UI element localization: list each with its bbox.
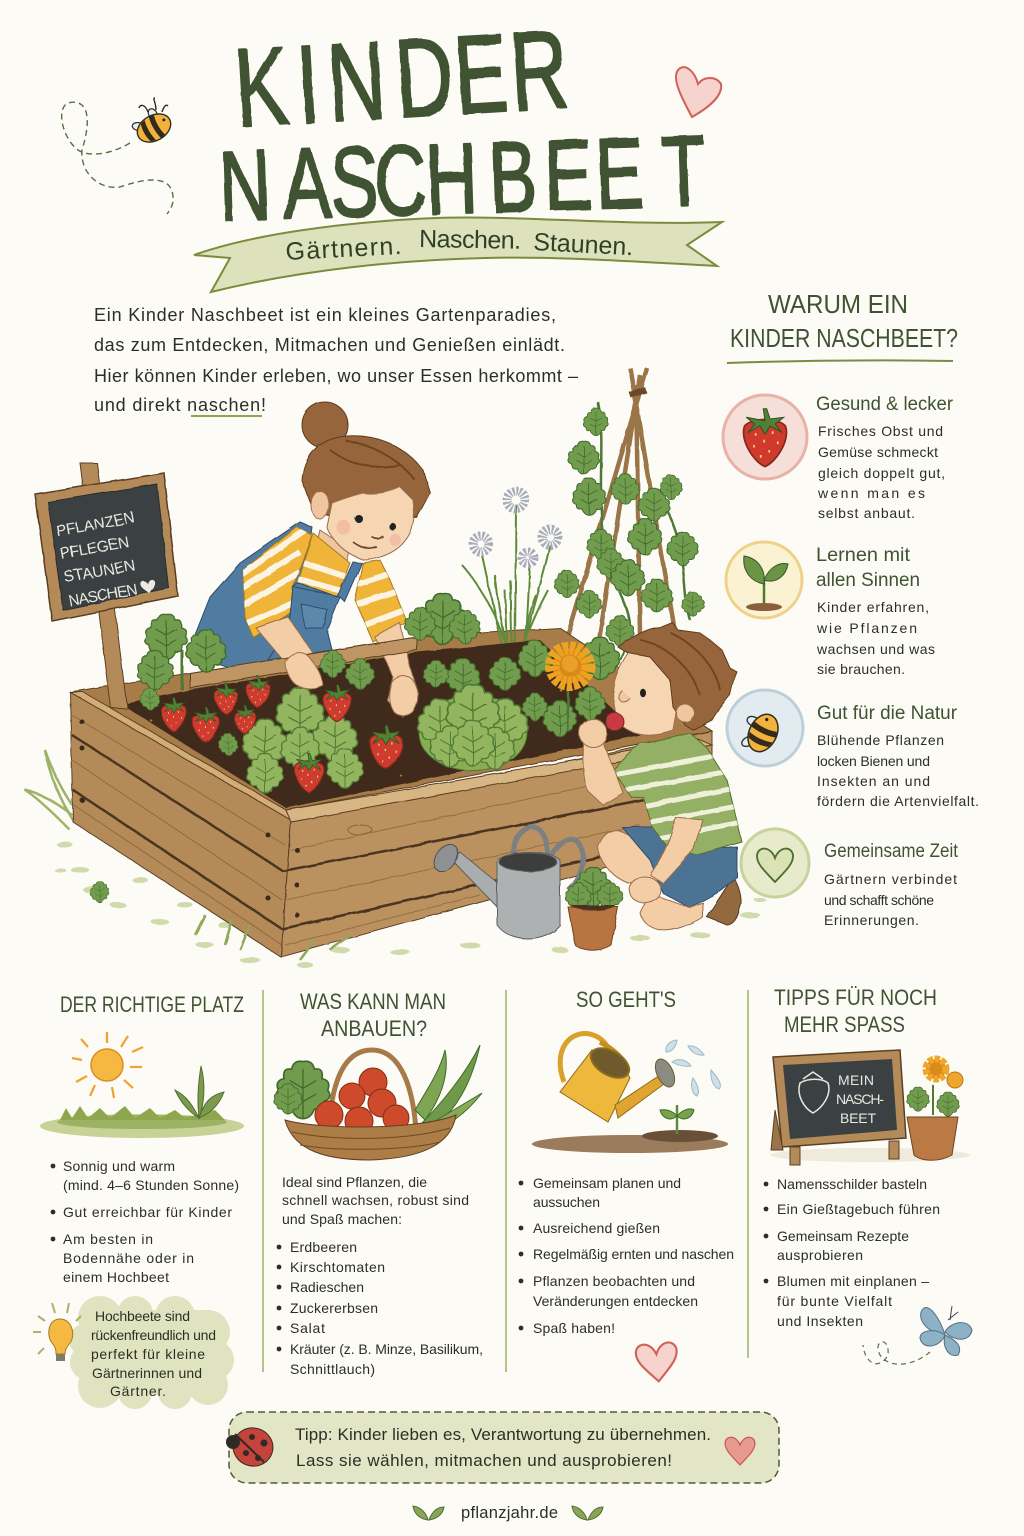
column heading [774, 985, 937, 1037]
column heading: SO GEHT'S [576, 987, 676, 1012]
bullet list: ausprobieren [777, 1247, 863, 1263]
intro paragraph: und Spaß machen: [282, 1211, 402, 1227]
bullet list: Namensschilder basteln [777, 1176, 927, 1192]
grass at bed base [195, 915, 350, 960]
benefit: gesund: Frisches Obst und [818, 423, 943, 439]
bed rim in front of girl [190, 637, 417, 688]
banner subtitle: Staunen. [533, 228, 634, 261]
boy [579, 622, 742, 930]
column 2: was kann man anbauen [274, 989, 483, 1377]
footer [413, 1504, 603, 1522]
benefit: zeit: Gemeinsame Zeit [824, 841, 959, 862]
bullet list: Bodennähe oder in [63, 1250, 194, 1266]
bullet list [51, 1158, 239, 1285]
bullet list: (mind. 4–6 Stunden Sonne) [63, 1177, 239, 1193]
soil [121, 640, 640, 808]
benefit: gesund: selbst anbaut. [818, 505, 915, 521]
bullet list: Blumen mit einplanen – [777, 1273, 929, 1289]
tepee poles [565, 368, 676, 660]
arm to knee [650, 817, 703, 883]
bullet list: Pflanzen beobachten und [533, 1273, 695, 1289]
benefit: gesund: Gemüse schmeckt [818, 444, 938, 460]
intro paragraph [282, 1174, 469, 1227]
column heading: TIPPS FÜR NOCH [774, 985, 937, 1010]
banner [194, 217, 722, 292]
bed left face [70, 692, 291, 957]
icon: soil and sprout [532, 1105, 728, 1153]
icon: ladybug [226, 1423, 277, 1471]
icon: chalkboard with pot: MEIN [838, 1072, 874, 1088]
lettuce [417, 684, 528, 771]
callout: hochbeete [69, 1296, 234, 1409]
bib and straps [268, 562, 362, 660]
benefit: zeit [741, 829, 959, 928]
leg upper [598, 830, 665, 883]
climbing plant [554, 402, 704, 660]
benefit: lernen: wie Pflanzen [816, 620, 917, 636]
bullet list: Spaß haben! [533, 1320, 615, 1336]
benefit: lernen: wachsen und was [816, 641, 935, 657]
intro text: das zum Entdecken, Mitmachen und Genießen einlädt. [94, 335, 565, 355]
sign text: NASCHEN [67, 581, 139, 610]
bullet list: Ausreichend gießen [533, 1220, 660, 1236]
bed back rim [70, 628, 712, 810]
shirt with stripes [236, 527, 410, 642]
icon: chalkboard with pot: NASCH- [836, 1091, 884, 1107]
benefit: natur: Insekten an und [817, 773, 930, 789]
benefit: zeit: Gärtnern verbindet [824, 871, 957, 887]
benefit: natur: Gut für die Natur [817, 703, 958, 724]
title: KINDER [231, 7, 572, 151]
intro text: Hier können Kinder erleben, wo unser Essen herkommt – [94, 366, 578, 386]
column heading: DER RICHTIGE PLATZ [60, 992, 244, 1017]
garden plants [137, 594, 620, 793]
benefit: natur [727, 690, 979, 809]
bullet list: Gemeinsam planen und [533, 1175, 681, 1191]
shirt [613, 733, 742, 855]
benefit: gesund: Gesund & lecker [816, 394, 954, 415]
bullet list [277, 1239, 483, 1377]
intro paragraph: Ideal sind Pflanzen, die [282, 1174, 427, 1190]
benefit: lernen: Kinder erfahren, [817, 599, 929, 615]
benefit: zeit: Erinnerungen. [824, 912, 919, 928]
shorts [622, 827, 737, 908]
bee with dashed flight path [62, 98, 176, 214]
callout: hochbeete: Gärtner. [110, 1383, 166, 1399]
icon: light bulb [33, 1303, 81, 1361]
bed front face [281, 731, 712, 957]
marigold [552, 648, 588, 730]
column heading: WAS KANN MAN [300, 989, 446, 1014]
column 1: der richtige platz [33, 992, 244, 1409]
banner subtitle [285, 225, 634, 266]
bullet list: Zuckererbsen [290, 1300, 378, 1316]
intro paragraph: schnell wachsen, robust sind [282, 1192, 469, 1208]
column dividers [263, 990, 748, 1372]
intro text: Ein Kinder Naschbeet ist ein kleines Gartenparadies, [94, 305, 556, 325]
chives [462, 491, 558, 660]
column heading: MEHR SPASS [784, 1012, 905, 1037]
bullet list: und Insekten [777, 1313, 863, 1329]
icon: grass and plant [40, 1066, 244, 1138]
column heading: ANBAUEN? [321, 1016, 427, 1041]
bullet list: Am besten in [63, 1231, 153, 1247]
icon: heart [725, 1437, 755, 1465]
benefit: gesund: wenn man es [817, 485, 925, 501]
benefit: gesund [723, 394, 954, 521]
callout: hochbeete: perfekt für kleine [91, 1346, 205, 1362]
shoe [707, 877, 741, 925]
benefit: natur: Blühende Pflanzen [817, 732, 944, 748]
arm [583, 743, 623, 805]
icon: heart [635, 1342, 679, 1383]
callout: hochbeete: rückenfreundlich und [91, 1327, 216, 1343]
benefit: lernen [726, 542, 935, 677]
callout: hochbeete: Gärtnerinnen und [92, 1365, 202, 1381]
benefit: lernen: allen Sinnen [816, 570, 920, 591]
bullet list: Veränderungen entdecken [533, 1293, 698, 1309]
sign text [55, 508, 157, 610]
benefit: zeit: und schafft schöne [824, 892, 934, 908]
benefit: natur: fördern die Artenvielfalt. [817, 793, 979, 809]
icon: water drops [666, 1040, 720, 1096]
overalls [193, 522, 332, 668]
benefit: gesund: gleich doppelt gut, [818, 465, 945, 481]
bullet list: Schnittlauch) [290, 1361, 375, 1377]
icon: chalkboard with pot: BEET [840, 1110, 876, 1126]
sign text: PFLEGEN [59, 534, 131, 563]
column 4: tipps [764, 985, 972, 1364]
callout: hochbeete: Hochbeete sind [95, 1308, 190, 1324]
bullet list: Radieschen [290, 1279, 364, 1295]
illustration: raised bed scene [25, 368, 766, 968]
title: NASCHBEET [217, 115, 707, 243]
large strawberry plant [242, 688, 363, 793]
bullet list: Gut erreichbar für Kinder [63, 1204, 232, 1220]
icon: sprouts [413, 1506, 603, 1520]
banner subtitle: Gärtnern. [285, 232, 402, 266]
bullet list: Salat [290, 1320, 325, 1336]
tip text: Lass sie wählen, mitmachen und ausprobieren! [296, 1451, 672, 1470]
head [613, 650, 680, 735]
footer: pflanzjahr.de [461, 1504, 558, 1522]
sign text: STAUNEN [63, 557, 137, 586]
bullet list: für bunte Vielfalt [777, 1293, 892, 1309]
ear [311, 491, 329, 519]
boy hand and strawberry [579, 719, 607, 747]
strawberries [161, 676, 402, 793]
heading: warum: KINDER NASCHBEET? [730, 323, 958, 353]
bullet list: Gemeinsam Rezepte [777, 1228, 909, 1244]
intro text: und direkt naschen! [94, 395, 266, 415]
benefit: lernen: sie brauchen. [817, 661, 905, 677]
potted plant [565, 867, 623, 950]
bullet list: Erdbeeren [290, 1239, 357, 1255]
neck [315, 530, 350, 568]
hand on knee [629, 877, 661, 903]
icon: basket with vegetables [274, 1045, 482, 1160]
watering can [429, 826, 583, 938]
tip text [295, 1425, 711, 1470]
girl hands [285, 653, 418, 716]
leg lower [640, 897, 703, 930]
bullet list [519, 1175, 734, 1336]
intro text [94, 305, 578, 416]
girl [193, 402, 430, 717]
benefit: lernen: Lernen mit [816, 545, 911, 566]
heading: warum [727, 289, 958, 363]
bullet list: Regelmäßig ernten und naschen [533, 1246, 734, 1262]
heading: warum: WARUM EIN [768, 289, 908, 319]
bullet list: aussuchen [533, 1194, 600, 1210]
bullet list: einem Hochbeet [63, 1269, 169, 1285]
tip text: Tipp: Kinder lieben es, Verantwortung zu übernehmen. [295, 1425, 711, 1444]
sign [35, 463, 178, 708]
hair [618, 622, 737, 730]
icon: butterfly [863, 1306, 972, 1364]
bullet list: Sonnig und warm [63, 1158, 175, 1174]
icon: chalkboard with pot [770, 1050, 970, 1165]
banner subtitle: Naschen. [419, 225, 521, 255]
bullet list [764, 1176, 940, 1329]
sign text: PFLANZEN [55, 510, 136, 540]
face [327, 487, 414, 560]
benefit: natur: locken Bienen und [817, 753, 930, 769]
icon: yellow watering can [560, 1033, 679, 1122]
bullet list: Kirschtomaten [290, 1259, 385, 1275]
icon: sun [72, 1032, 143, 1098]
grass left [25, 750, 73, 830]
hair with bun [302, 402, 430, 520]
column 3: so geht's [519, 987, 734, 1383]
bullet list: Kräuter (z. B. Minze, Basilikum, [290, 1341, 483, 1357]
tip box [226, 1412, 779, 1483]
heart top [676, 67, 721, 117]
title [217, 7, 707, 243]
bullet list: Ein Gießtagebuch führen [777, 1201, 940, 1217]
ground [54, 842, 766, 968]
arms [256, 617, 313, 660]
column heading [300, 989, 446, 1041]
